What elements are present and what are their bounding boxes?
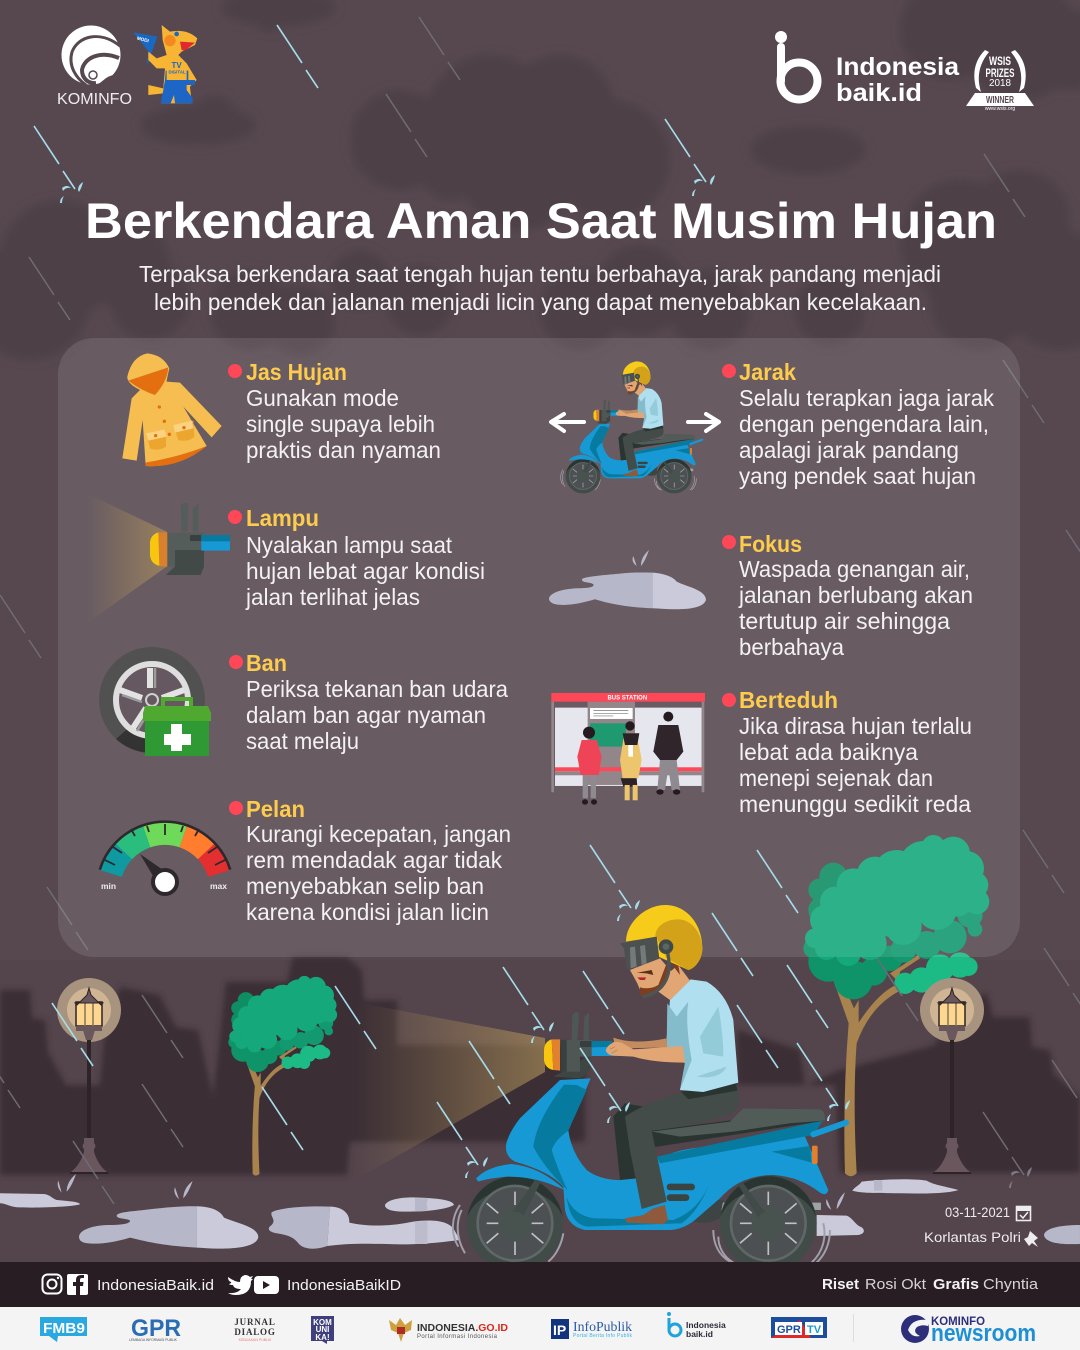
logo: Kominfo: KOMINFO xyxy=(57,91,132,108)
footer: partner logos: KOM xyxy=(313,1318,332,1327)
footer: partner logos: JURNAL xyxy=(234,1317,276,1327)
badge: WSIS Prizes 2018: www.wsis.org xyxy=(985,106,1015,112)
icon: speedometer: min xyxy=(101,881,116,891)
date and source: 03-11-2021 xyxy=(945,1205,1010,1220)
icon: small rider with distance arrows xyxy=(551,361,719,493)
intro text xyxy=(139,261,941,315)
text: Jarak: Selalu terapkan jaga jarak xyxy=(739,385,994,411)
icon: puddle xyxy=(549,550,706,609)
text: Lampu: Lampu xyxy=(246,505,319,531)
footer: partner logos: TV xyxy=(807,1324,822,1336)
text: Ban xyxy=(229,650,508,754)
text: Lampu: Nyalakan lampu saat xyxy=(246,532,453,558)
text: Fokus: jalanan berlubang akan xyxy=(738,582,973,608)
footer: partner logos: KEBIJAKAN PUBLIK xyxy=(239,1338,272,1342)
icon: speedometer xyxy=(101,823,229,894)
title: Berkendara Aman Saat Musim Hujan xyxy=(85,193,997,249)
text: Jas Hujan xyxy=(228,359,441,463)
text: Fokus: berbahaya xyxy=(739,634,844,660)
rain splashes xyxy=(60,175,850,1178)
footer: partner logos: INDONESIA.GO.ID xyxy=(417,1322,508,1334)
text: Lampu xyxy=(228,505,485,610)
footer: partner logos: IP xyxy=(553,1322,566,1338)
date and source xyxy=(924,1205,1038,1247)
headlight beam xyxy=(355,1002,545,1180)
icon: speedometer: max xyxy=(210,881,227,891)
faded splash xyxy=(1009,1167,1032,1188)
footer: social bar: Rosi Okt xyxy=(865,1276,927,1293)
text: Jas Hujan: Jas Hujan xyxy=(246,359,347,385)
text: Lampu: hujan lebat agar kondisi xyxy=(246,558,485,584)
footer: partner logos: UNI xyxy=(316,1325,329,1334)
text: Ban: Periksa tekanan ban udara xyxy=(246,676,508,702)
text: Jas Hujan: praktis dan nyaman xyxy=(246,437,441,463)
footer: social bar: Chyntia xyxy=(983,1276,1039,1293)
text: Jas Hujan: single supaya lebih xyxy=(246,411,435,437)
icon: raincoat xyxy=(122,353,222,466)
footer: partner logos: baik.id xyxy=(686,1329,713,1339)
text: Berteduh: Jika dirasa hujan terlalu xyxy=(739,713,972,739)
footer: partner logos: DIALOG xyxy=(234,1327,276,1337)
footer: partner logos: FMB9 xyxy=(43,1320,85,1337)
ground tone xyxy=(0,960,1080,1262)
text: Fokus: Waspada genangan air, xyxy=(739,556,970,582)
tree: right xyxy=(803,835,989,1176)
mascot: TV Digital: DIGITAL xyxy=(168,70,186,75)
text: Jarak: Jarak xyxy=(739,359,797,385)
footer: social bar xyxy=(0,1262,1080,1307)
icon: bus station xyxy=(551,693,705,805)
text: Jarak: yang pendek saat hujan xyxy=(739,463,976,489)
text: Jarak: dengan pengendara lain, xyxy=(739,411,989,437)
logo: Indonesia Baik: Indonesia xyxy=(836,53,960,81)
footer: partner logos xyxy=(0,1307,1080,1350)
illustration: rider on blue scooter in rain xyxy=(453,905,846,1272)
badge: WSIS Prizes 2018: WINNER xyxy=(986,95,1015,106)
city skyline xyxy=(0,957,1080,1175)
puddles: right xyxy=(817,1179,1080,1244)
storm clouds xyxy=(0,0,1080,360)
icon: headlight xyxy=(87,493,230,623)
footer: partner logos: InfoPublik xyxy=(573,1320,632,1335)
text: Berteduh: menunggu sedikit reda xyxy=(739,791,971,817)
mascot: TV Digital: MODI xyxy=(136,35,149,43)
footer: social bar: IndonesiaBaikID xyxy=(287,1277,401,1294)
text: Fokus: tertutup air sehingga xyxy=(739,608,950,634)
footer: social bar: IndonesiaBaik.id xyxy=(97,1277,214,1294)
date and source: Korlantas Polri xyxy=(924,1230,1021,1245)
panel: tips card xyxy=(58,338,1020,957)
text: Berteduh: Berteduh xyxy=(739,687,838,713)
intro text: Terpaksa berkendara saat tengah hujan tentu berbahaya, jarak pandang menjadi xyxy=(139,261,941,287)
text: Pelan: rem mendadak agar tidak xyxy=(246,847,502,873)
text: Berteduh: lebat ada baiknya xyxy=(739,739,918,765)
street lamp: left xyxy=(57,978,121,1174)
mascot: TV Digital xyxy=(133,25,197,103)
tree: left xyxy=(228,976,337,1176)
footer: partner logos: Indonesia xyxy=(686,1320,726,1330)
text: Jarak xyxy=(722,359,994,489)
mascot: TV Digital: TV xyxy=(172,61,182,70)
street lamp: right xyxy=(920,978,984,1174)
footer: social bar: Riset xyxy=(822,1276,859,1293)
badge: WSIS Prizes 2018: WSIS xyxy=(989,54,1011,68)
footer: partner logos: newsroom xyxy=(931,1320,1036,1347)
footer: partner logos: GPR xyxy=(777,1324,801,1336)
text: Jarak: apalagi jarak pandang xyxy=(739,437,959,463)
logo: Indonesia Baik: baik.id xyxy=(836,79,922,107)
text: Ban: Ban xyxy=(246,650,287,676)
footer: partner logos: Portal Berita Info Publik xyxy=(573,1333,632,1339)
text: Lampu: jalan terlihat jelas xyxy=(245,584,420,610)
footer: social bar: Grafis xyxy=(933,1276,979,1293)
footer: partner logos: Portal Informasi Indonesia xyxy=(417,1334,498,1340)
text: Pelan: Pelan xyxy=(246,796,305,822)
text: Berteduh: menepi sejenak dan xyxy=(739,765,933,791)
intro text: lebih pendek dan jalanan menjadi licin yang dapat menyebabkan kecelakaan. xyxy=(154,289,927,315)
footer: partner logos: KOMINFO xyxy=(931,1314,985,1328)
logo: Indonesia Baik xyxy=(775,31,960,107)
bright rain drops xyxy=(34,25,838,1165)
badge: WSIS Prizes 2018 xyxy=(966,50,1034,112)
text: Fokus: Fokus xyxy=(739,531,802,557)
text: Fokus xyxy=(722,531,973,660)
badge: WSIS Prizes 2018: 2018 xyxy=(989,78,1011,89)
icon: tyre with first-aid kit xyxy=(99,647,211,756)
footer: partner logos: KA! xyxy=(315,1333,330,1342)
text: Berteduh xyxy=(722,687,972,817)
logo: Kominfo xyxy=(57,26,132,108)
badge: WSIS Prizes 2018: PRIZES xyxy=(986,66,1014,80)
text: Pelan: karena kondisi jalan licin xyxy=(246,899,489,925)
puddles: left xyxy=(0,1174,460,1249)
text: Pelan: menyebabkan selip ban xyxy=(246,873,484,899)
text: Ban: saat melaju xyxy=(246,728,359,754)
text: Pelan: Kurangi kecepatan, jangan xyxy=(246,821,511,847)
text: Pelan xyxy=(229,796,511,925)
text: Jas Hujan: Gunakan mode xyxy=(246,385,399,411)
footer: partner logos: LEMBAGA INFORMASI PUBLIK xyxy=(129,1338,178,1342)
footer: partner logos: GPR xyxy=(131,1315,181,1342)
icon: bus station: BUS STATION xyxy=(607,696,647,702)
text: Ban: dalam ban agar nyaman xyxy=(246,702,486,728)
